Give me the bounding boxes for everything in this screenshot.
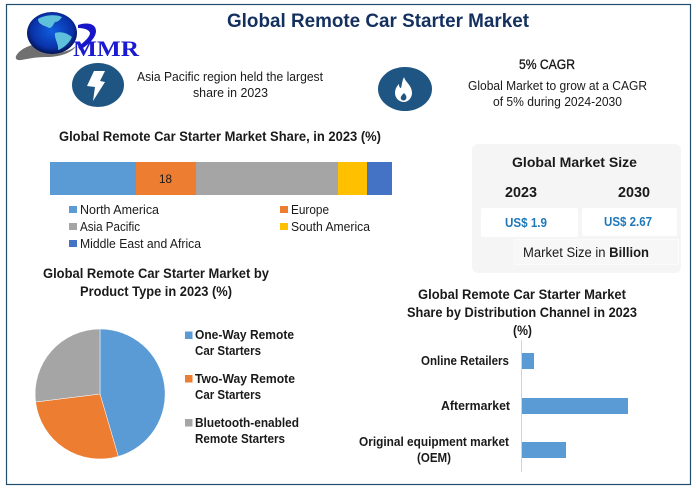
data label: Europe: 18	[159, 172, 172, 186]
pie legend: Car Starters	[195, 344, 261, 358]
year 2030: 2030	[618, 185, 650, 201]
value 2023: US$ 1.9	[505, 215, 547, 230]
heading: distribution channel: (%)	[513, 323, 532, 338]
stacked bar legend: Asia Pacific	[80, 220, 140, 234]
pie legend: Car Starters	[195, 388, 261, 402]
year 2023: 2023	[505, 185, 537, 201]
bar chart: distribution channel	[359, 340, 628, 472]
CAGR callout	[468, 57, 647, 109]
bar category labels: (OEM)	[417, 451, 451, 465]
heading: product type: Product Type in 2023 (%)	[80, 284, 232, 299]
pie legend: One-Way Remote	[195, 328, 294, 342]
stacked bar legend: South America	[291, 220, 370, 234]
icon: lightning bolt	[72, 63, 124, 107]
title: Global Remote Car Starter Market	[227, 11, 530, 32]
heading: distribution channel	[407, 287, 637, 338]
logo: MMR globe	[16, 12, 140, 61]
bar category labels: Original equipment market	[359, 435, 510, 449]
stacked bar legend: Europe	[291, 203, 329, 217]
text: Asia Pacific share: share in 2023	[193, 86, 268, 100]
bar: OEM	[522, 442, 566, 458]
stacked bar legend: Middle East and Africa	[80, 237, 201, 251]
heading: product type: Global Remote Car Starter Market by	[43, 266, 269, 281]
value 2030	[582, 208, 677, 236]
text: Asia Pacific share	[137, 70, 324, 100]
pie legend	[185, 328, 299, 446]
CAGR callout: 5% CAGR	[519, 57, 575, 72]
bar: online retailers	[522, 353, 534, 369]
heading: product type	[43, 266, 269, 299]
heading: distribution channel: Share by Distribution Channel in 2023	[407, 305, 637, 320]
icon: flame	[378, 67, 432, 111]
unit note	[514, 240, 678, 264]
heading: market share chart: Global Remote Car Starter Market Share, in 2023 (%)	[59, 129, 381, 144]
heading: distribution channel: Global Remote Car Starter Market	[418, 287, 626, 302]
stacked bar chart	[50, 162, 392, 195]
text: Asia Pacific share: Asia Pacific region held the largest	[137, 70, 324, 84]
pie legend: Bluetooth-enabled	[195, 416, 299, 430]
value 2023	[481, 208, 578, 237]
logo wordmark: MMR	[73, 36, 140, 61]
pie chart	[35, 329, 165, 459]
bar: aftermarket	[522, 398, 628, 414]
pie legend: Remote Starters	[195, 432, 285, 446]
pie legend: Two-Way Remote	[195, 372, 295, 386]
panel: global market size	[472, 144, 681, 273]
bar category labels	[359, 354, 511, 465]
bar category labels: Aftermarket	[441, 399, 511, 413]
bar category labels: Online Retailers	[421, 354, 509, 368]
stacked bar legend	[69, 203, 370, 251]
unit note: Market Size in Billion	[523, 245, 649, 260]
heading: market size: Global Market Size	[512, 154, 637, 170]
CAGR callout: of 5% during 2024-2030	[493, 95, 622, 109]
value 2030: US$ 2.67	[604, 214, 652, 229]
stacked bar legend: North America	[80, 203, 159, 217]
CAGR callout: Global Market to grow at a CAGR	[468, 79, 647, 93]
